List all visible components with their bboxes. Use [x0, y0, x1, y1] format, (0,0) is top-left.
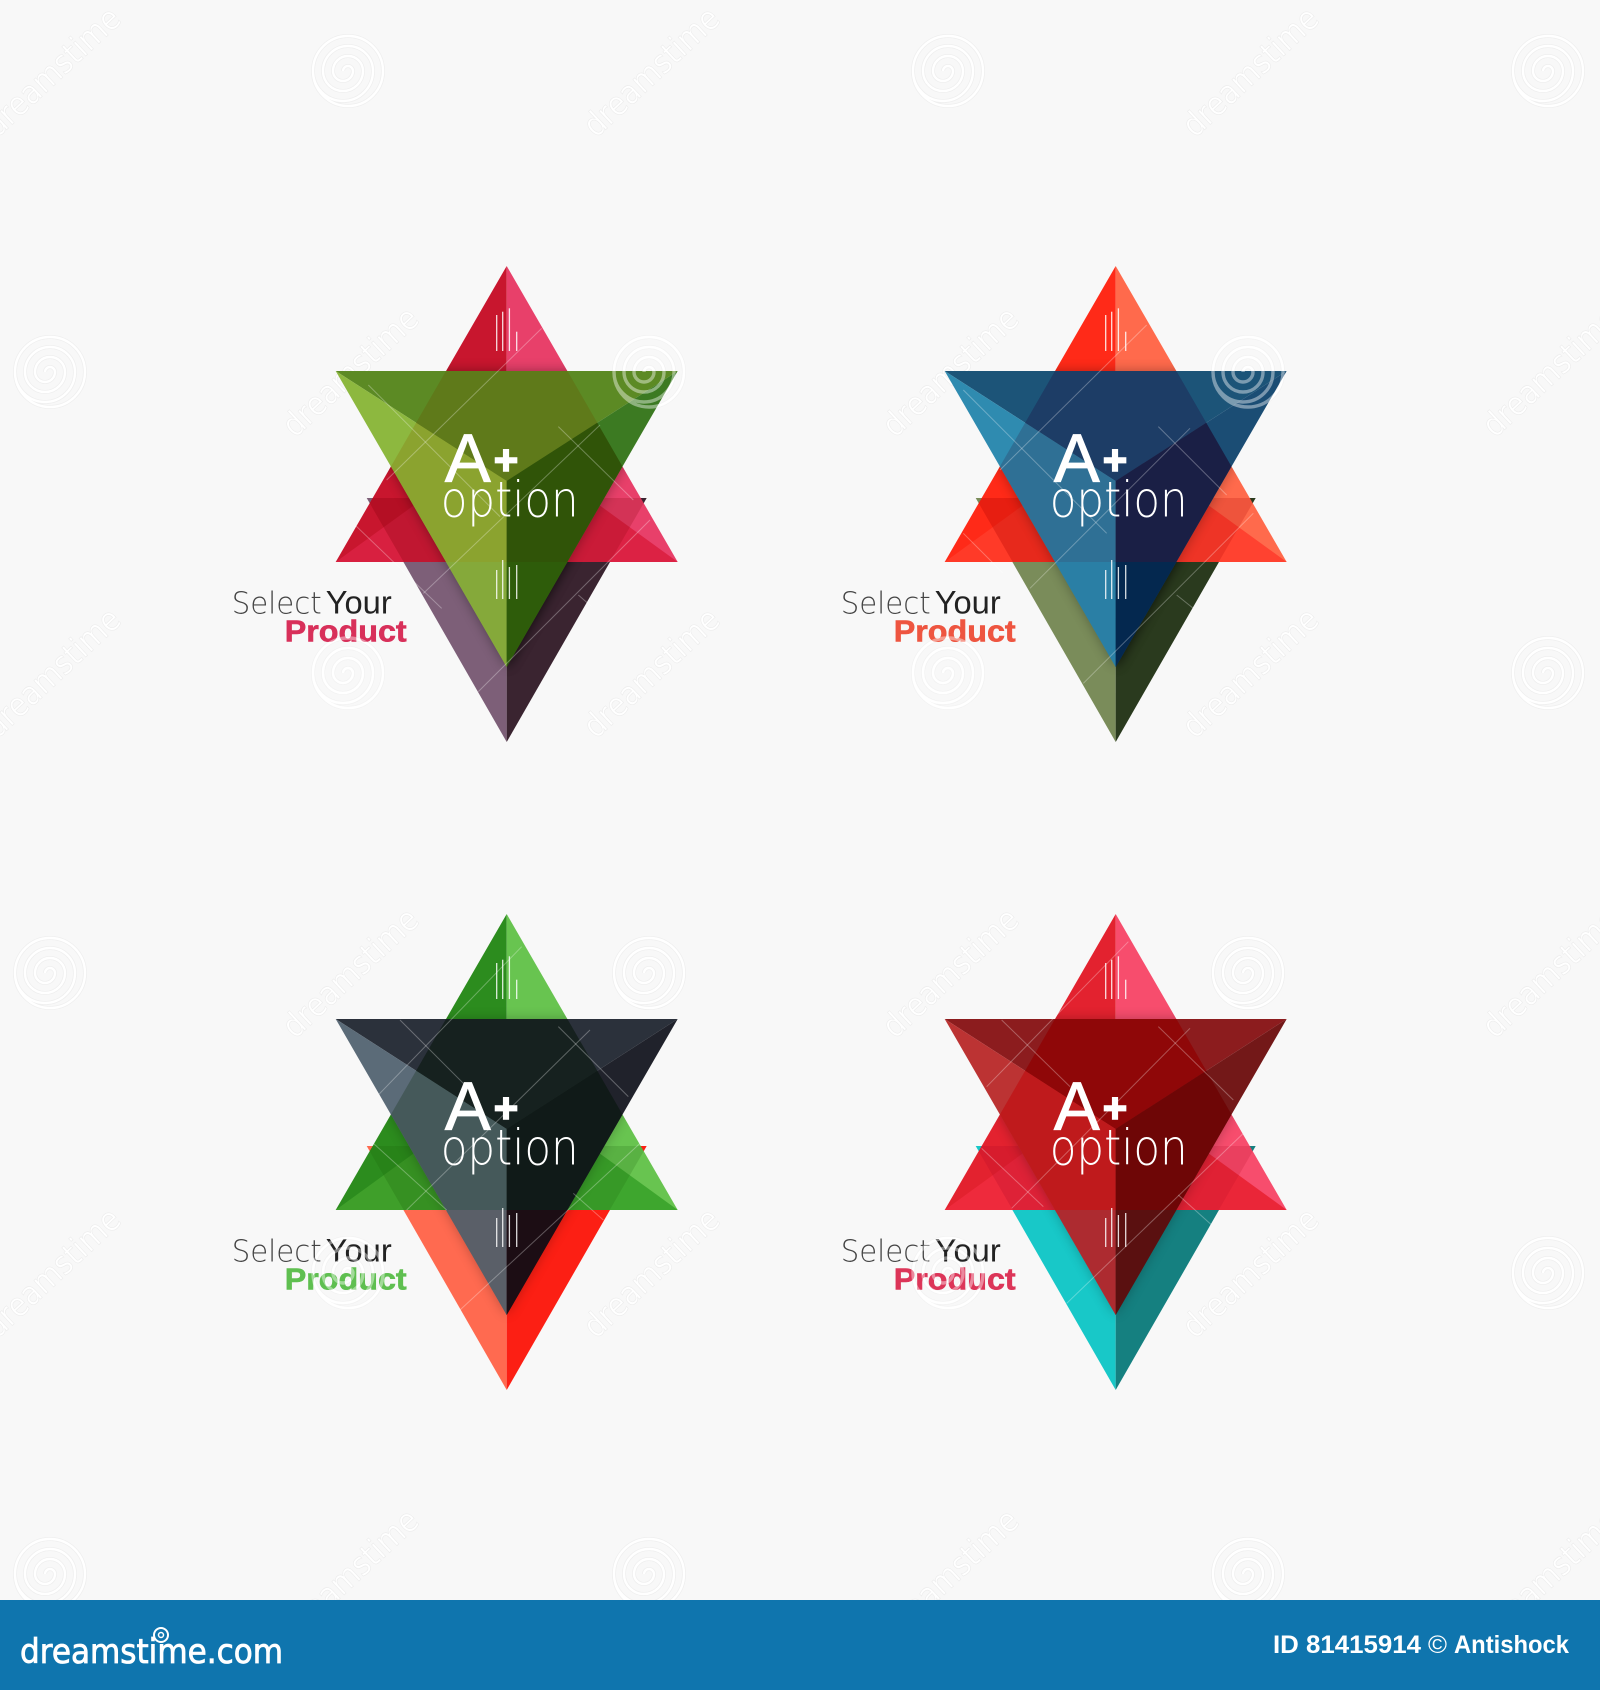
front triangle: [945, 371, 1287, 667]
label: A+: [1054, 1068, 1127, 1145]
middle triangle: [945, 266, 1287, 562]
watermark overlay lines and spirals: [313, 325, 1283, 1310]
label: A+: +: [494, 436, 518, 484]
caption: Select Your Product: [232, 584, 407, 649]
label: A+: [445, 420, 518, 497]
caption: Select Your Product: [841, 584, 1016, 649]
label: option: option: [441, 1120, 579, 1177]
label: option: option: [441, 472, 579, 529]
label: A+: +: [1103, 436, 1127, 484]
caption: Select Your Product: Select: [841, 586, 931, 621]
caption: Select Your Product: Product: [285, 1262, 407, 1297]
watermark pattern: dreamstime: [274, 299, 426, 445]
top bar marks: [1106, 308, 1126, 351]
watermark pattern: dreamstime: [575, 600, 727, 746]
caption: Select Your Product: Select: [232, 1234, 322, 1269]
middle triangle: [336, 914, 678, 1210]
top bar marks: [1106, 956, 1126, 999]
watermark pattern: dreamstime: [1174, 1200, 1326, 1346]
label: A+: +: [494, 1084, 518, 1132]
footer image id and credit: ©: [1428, 1631, 1448, 1659]
panel: charcoal and green star: [232, 914, 678, 1390]
label: A+: +: [1103, 1084, 1127, 1132]
footer image id and credit: ID 81415914: [1273, 1631, 1421, 1659]
bottom bar marks: [497, 1208, 517, 1247]
top bar marks: [497, 956, 517, 999]
top bar marks: [497, 308, 517, 351]
label: A+: [445, 1068, 518, 1145]
panel: navy and red star: [841, 266, 1287, 742]
caption: Select Your Product: Your: [326, 584, 392, 620]
caption: Select Your Product: Product: [894, 614, 1016, 649]
bottom bar marks: [1106, 560, 1126, 599]
watermark pattern: dreamstime: [274, 900, 426, 1046]
label: option: option: [1050, 472, 1188, 529]
watermark pattern: dreamstime: [874, 900, 1026, 1046]
back triangle: [976, 498, 1256, 742]
watermark pattern: dreamstime: [274, 1501, 426, 1647]
caption: Select Your Product: Select: [841, 1234, 931, 1269]
panel: green and crimson star: [232, 266, 678, 742]
footer bar: [0, 1600, 1600, 1690]
label: A+: A: [1054, 1068, 1100, 1145]
caption: Select Your Product: [841, 1232, 1016, 1297]
caption: Select Your Product: Your: [326, 1232, 392, 1268]
middle triangle: [945, 914, 1287, 1210]
caption: Select Your Product: Product: [894, 1262, 1016, 1297]
footer logo: dreamstime.com: dreamstime.com: [20, 1632, 283, 1672]
watermark pattern: dreamstime: [1174, 600, 1326, 746]
caption: Select Your Product: Select: [232, 586, 322, 621]
label: A+: A: [445, 420, 491, 497]
front triangle: [945, 1019, 1287, 1315]
middle triangle: [336, 266, 678, 562]
watermark pattern: dreamstime: [874, 1501, 1026, 1647]
back triangle: [367, 498, 647, 742]
caption: Select Your Product: Your: [935, 584, 1001, 620]
front triangle: [336, 371, 678, 667]
caption: Select Your Product: Product: [285, 614, 407, 649]
panel: maroon and teal star: [841, 914, 1287, 1390]
caption: Select Your Product: [232, 1232, 407, 1297]
front triangle: [336, 1019, 678, 1315]
back triangle: [976, 1146, 1256, 1390]
bottom bar marks: [497, 560, 517, 599]
back triangle: [367, 1146, 647, 1390]
bottom bar marks: [1106, 1208, 1126, 1247]
label: A+: A: [445, 1068, 491, 1145]
label: A+: [1054, 420, 1127, 497]
label: option: option: [1050, 1120, 1188, 1177]
footer image id and credit: Antishock: [1454, 1631, 1569, 1659]
caption: Select Your Product: Your: [935, 1232, 1001, 1268]
watermark pattern: dreamstime: [874, 299, 1026, 445]
label: A+: A: [1054, 420, 1100, 497]
watermark pattern: dreamstime: [575, 1200, 727, 1346]
footer image id and credit: [1273, 1631, 1569, 1659]
